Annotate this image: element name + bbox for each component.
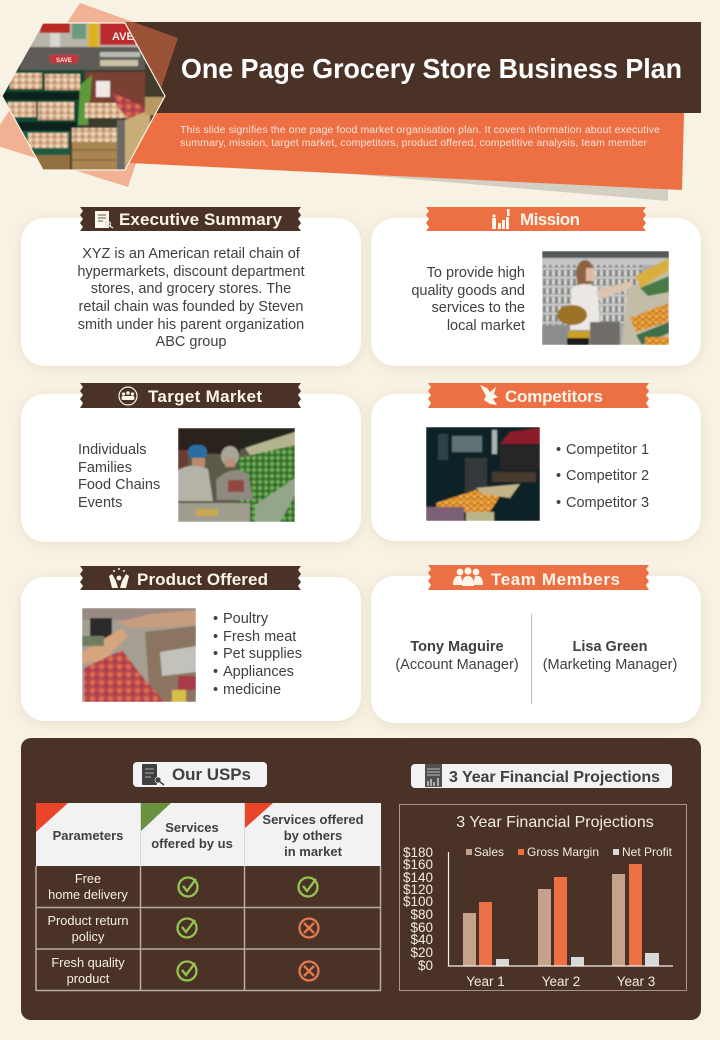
icon: people in circle [119,387,137,405]
list: Poultry [223,611,269,627]
y axis labels: $60 [410,920,433,935]
body text: services to the [432,300,525,316]
y axis labels: $160 [403,857,433,872]
ribbon [426,207,646,231]
heading: Target Market [148,387,262,406]
y axis labels: $20 [410,945,433,960]
table: USPs: Parameters [53,828,123,843]
list: Competitor 1 [566,442,649,458]
table: USPs: by others [284,828,342,843]
photo: night market [426,427,540,521]
dark background [21,738,701,1020]
ribbon [80,207,301,231]
photo: couple shopping [178,428,295,522]
icon: report with magnifier [142,764,164,785]
panel: team members [371,565,701,723]
panel: competitors [371,383,701,541]
list: Fresh meat [223,629,296,645]
list: Competitor 3 [566,495,649,511]
decorative tilted rectangle [0,3,178,187]
icon: leaf burst [480,385,498,405]
subtitle band [130,113,684,190]
store sign text: AVE [112,31,134,43]
bars: year 2 [538,877,584,966]
list: • [213,611,218,627]
title band [125,22,701,113]
body text: To provide high [427,265,525,281]
list: • [556,495,561,511]
list: • [556,468,561,484]
icon: hands holding [109,568,129,588]
card [371,576,701,723]
icon: check [178,962,196,980]
subtitle band shadow [340,173,668,201]
body text: quality goods and [411,283,525,299]
card [21,577,361,721]
panel: mission [371,207,701,366]
panel: product offered [21,566,361,721]
y axis labels: $120 [403,882,433,897]
table header [36,803,381,866]
heading: Our USPs [133,762,267,787]
legend: Net Profit [622,845,673,859]
icon: check [178,878,198,896]
member: Tony Maguire [395,639,519,673]
body text: Families [78,460,132,476]
ribbon [80,566,301,590]
list: Pet supplies [223,646,302,662]
chart title: 3 Year Financial Projections [456,814,654,831]
icon: rising bars with climber [492,209,510,229]
table: USPs: product [67,971,110,986]
photo: fruit stall [82,608,196,702]
heading: Executive Summary [119,210,283,229]
panel: USPs and financials [21,738,701,1020]
body text: smith under his parent organization [78,317,304,333]
table: USPs: in market [284,844,343,859]
body text [78,442,160,511]
subtitle: summary, mission, target market, competitors, product offered, competitive analysis, team member [180,137,648,149]
body text: XYZ is an American retail chain of [82,246,301,262]
panel: executive summary [21,207,361,366]
panel: target market [21,383,361,542]
list: • [556,442,561,458]
legend [466,845,673,859]
body text: Individuals [78,442,147,458]
ribbon [428,565,649,590]
y axis labels: $100 [403,894,433,909]
store sign text [56,32,134,62]
list [556,442,649,511]
body text: hypermarkets, discount department [77,264,305,280]
body text: retail chain was founded by Steven [79,299,303,315]
card [21,394,361,542]
icon: financial report [425,764,442,787]
member: Lisa Green: Lisa Green [573,639,647,655]
table grid [36,866,381,991]
heading: Product Offered [137,570,268,589]
body text [77,246,305,350]
bars: year 1 [463,902,509,966]
subtitle [180,124,660,149]
axes [448,852,673,966]
list: Appliances [223,664,294,680]
table: USPs: home delivery [48,887,128,902]
table: USPs: Product return [47,913,129,928]
list: • [213,629,218,645]
list: • [213,682,218,698]
card [21,218,361,366]
hexagon photo: supermarket produce [0,20,170,172]
member: Tony Maguire: (Account Manager) [395,657,519,673]
card [371,394,701,541]
table: USPs: policy [72,929,105,944]
heading: Team Members [491,570,620,589]
chart: 3 year financial projections [400,804,686,990]
table: USPs: Services [165,820,219,835]
row labels: Free [75,871,101,886]
table: USPs: Fresh quality [51,955,125,970]
hexagon outline [2,23,165,170]
list: medicine [223,682,281,698]
member: Tony Maguire: Tony Maguire [410,639,504,655]
heading: Our USPs: Our USPs [172,765,251,784]
icon: check [298,878,318,896]
heading: 3 Year Financial Projections: 3 Year Financial Projections [449,769,660,786]
body text: Events [78,495,122,511]
y axis labels: $0 [418,958,433,973]
y axis labels: $140 [403,870,433,885]
x axis labels: Year 2 [542,974,580,989]
list: • [213,646,218,662]
table: USPs: offered by us [151,836,233,851]
list [213,611,302,698]
body text: Food Chains [78,477,160,493]
body text: local market [447,318,525,334]
y axis labels: $80 [410,907,433,922]
x axis labels: Year 3 [617,974,655,989]
heading: Competitors [505,387,603,406]
table: USPs [36,803,381,991]
card [371,218,701,366]
heading: Mission [520,210,580,229]
ribbon [80,383,301,408]
table: USPs: Services offered [262,812,364,827]
legend: Gross Margin [527,845,599,859]
list: Competitor 2 [566,468,649,484]
title: One Page Grocery Store Business Plan [181,53,682,84]
icon: three people [453,567,483,586]
subtitle: This slide signifies the one page food market organisation plan. It covers information about executive [180,124,660,136]
x axis labels: Year 1 [466,974,505,989]
icon: check [178,918,196,938]
header banner [0,3,701,201]
heading: 3 Year Financial Projections [411,764,672,788]
icon: document with magnifier [95,211,113,228]
bars: year 3 [612,864,659,966]
icon: cross [300,918,318,938]
ribbon [428,383,649,408]
body text [411,265,525,334]
legend: Sales [474,845,504,859]
y axis labels [403,845,433,973]
body text: stores, and grocery stores. The [91,281,291,297]
icon: cross [300,962,318,980]
y axis labels: $180 [403,845,433,860]
member: Lisa Green: (Marketing Manager) [543,657,677,673]
member: Lisa Green [543,639,677,673]
y axis labels: $40 [410,932,433,947]
x axis labels [466,974,655,989]
store sign text: SAVE [56,58,72,64]
body text: ABC group [156,334,226,350]
list: • [213,664,218,680]
photo: woman shopping [542,251,669,345]
